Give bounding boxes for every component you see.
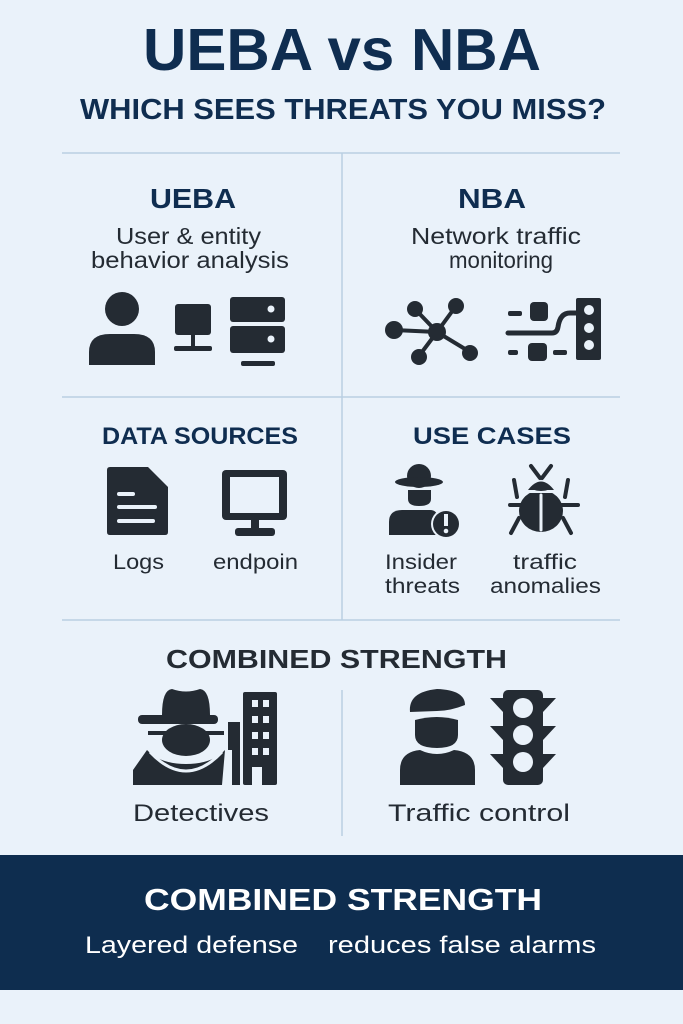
panel: UEBA: behavior analysis xyxy=(91,247,289,273)
icon: server xyxy=(230,297,285,366)
icon: endpoint monitor xyxy=(222,470,287,536)
panel: data sources: Logs xyxy=(113,551,164,574)
panel: use cases: anomalies xyxy=(490,575,601,598)
panel: traffic control: Traffic control xyxy=(388,800,570,827)
panel: UEBA: User & entity xyxy=(116,223,262,249)
heading: combined strength: COMBINED STRENGTH xyxy=(166,644,507,674)
footer band xyxy=(0,855,683,990)
panel: data sources: endpoin xyxy=(213,551,298,574)
panel: traffic control xyxy=(388,689,570,827)
panel: use cases xyxy=(385,423,601,598)
panel: data sources xyxy=(102,423,298,574)
footer band: COMBINED STRENGTH xyxy=(144,882,542,917)
icon: insider xyxy=(389,464,461,539)
panel: detectives: Detectives xyxy=(133,800,269,827)
panel: use cases: USE CASES xyxy=(413,423,571,450)
panel: NBA: NBA xyxy=(458,183,526,214)
panel: NBA: monitoring xyxy=(449,247,553,273)
footer band: Layered defense xyxy=(85,932,298,959)
panel: use cases: threats xyxy=(385,575,460,598)
panel: use cases: traffic xyxy=(513,551,577,574)
subtitle: WHICH SEES THREATS YOU MISS? xyxy=(80,94,606,126)
icon: log document xyxy=(107,467,168,535)
panel: NBA xyxy=(385,183,601,365)
icon: detective xyxy=(133,689,225,785)
icon: traffic flow xyxy=(508,298,601,361)
icon: officer xyxy=(400,689,475,785)
panel: data sources: DATA SOURCES xyxy=(102,423,298,450)
icon: user xyxy=(89,292,155,365)
panel: UEBA: UEBA xyxy=(150,183,236,214)
panel: UEBA xyxy=(89,183,289,366)
icon: network graph xyxy=(385,298,478,365)
panel: detectives xyxy=(133,689,277,827)
icon: traffic light xyxy=(490,690,556,785)
icon: bug xyxy=(510,466,578,533)
panel: use cases: Insider xyxy=(385,551,457,574)
footer band: reduces false alarms xyxy=(328,932,596,959)
icon: workstation xyxy=(174,304,212,351)
icon: building xyxy=(228,692,277,785)
title: UEBA vs NBA xyxy=(143,17,541,83)
panel: NBA: Network traffic xyxy=(411,223,581,249)
